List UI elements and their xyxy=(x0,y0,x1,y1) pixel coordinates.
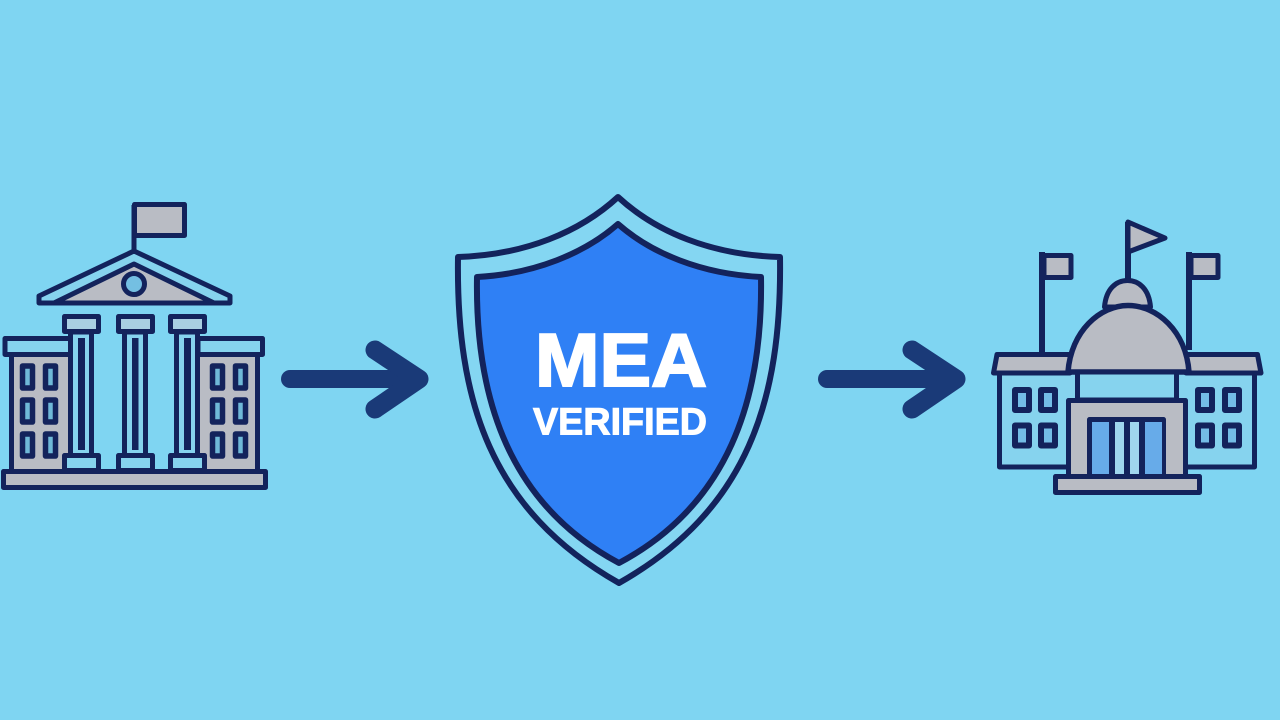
pediment roof xyxy=(39,251,230,303)
flag on pediment xyxy=(134,204,184,250)
shield text: MEA: MEA xyxy=(535,318,707,402)
entrance block xyxy=(1068,400,1186,476)
base step xyxy=(4,472,266,488)
dome xyxy=(1068,306,1189,372)
left column xyxy=(64,316,98,470)
windows xyxy=(1015,390,1239,446)
right flag xyxy=(1189,252,1218,350)
drum xyxy=(1078,372,1176,400)
right wing xyxy=(197,338,262,472)
roofs xyxy=(994,354,1261,373)
left flag xyxy=(1042,252,1071,352)
top flag xyxy=(1128,222,1165,280)
arrow: shield to right building xyxy=(827,350,956,409)
right column xyxy=(170,316,204,470)
shield inner face xyxy=(477,224,761,563)
center column xyxy=(118,316,152,470)
arrow: left building to shield xyxy=(290,350,419,409)
icon: classical government building xyxy=(4,204,266,488)
cupola xyxy=(1104,280,1150,307)
shield outer rim xyxy=(458,197,780,583)
icon: domed government building xyxy=(994,222,1261,492)
shield text: VERIFIED: VERIFIED xyxy=(533,402,707,444)
wing walls xyxy=(1000,372,1254,467)
left wing xyxy=(5,338,72,472)
icon: MEA verified shield xyxy=(458,197,780,583)
entrance steps xyxy=(1056,476,1200,492)
